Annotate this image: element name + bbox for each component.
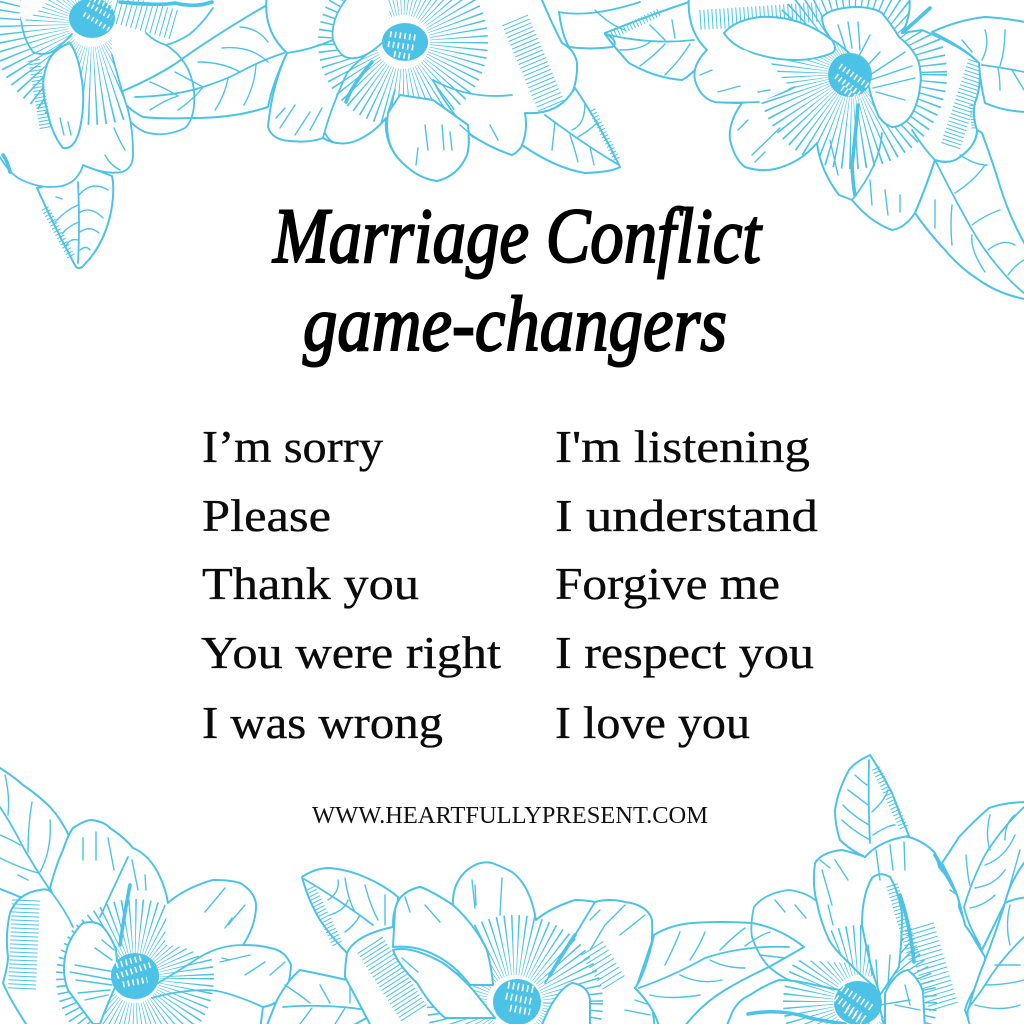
leaf: right of top middle flower (522, 88, 620, 173)
title line 1: Marriage Conflict (272, 192, 763, 279)
flower: bottom left (3, 820, 291, 1024)
leaf: long leaf between bottom middle and right flowers (635, 922, 804, 1024)
radial hatching (794, 16, 910, 132)
leaves: far right bottom (942, 802, 1024, 1024)
list: left column: Please (202, 490, 331, 541)
radial hatching (30, 0, 154, 86)
website footer: WWW.HEARTFULLYPRESENT.COM (312, 803, 708, 829)
list: right column: I'm listening (555, 421, 810, 472)
radial hatching (347, 0, 459, 98)
list: left column: I was wrong (202, 697, 443, 748)
list: right column: I respect you (555, 627, 814, 678)
leaf: long leaf between top left and top middle flowers (118, 5, 287, 118)
list: right column: Forgive me (555, 558, 780, 609)
flower: bottom right (725, 836, 985, 1024)
stamen (69, 0, 115, 38)
leaf: right side, descending (915, 130, 1024, 300)
leaf: above bottom middle flower (302, 868, 398, 953)
radial hatching (457, 945, 615, 1024)
flower: top middle (266, 0, 577, 181)
flower: top left (0, 0, 213, 187)
radial hatching (808, 950, 912, 1024)
floral border: bottom (0, 755, 1024, 1024)
flower: top right (689, 0, 980, 230)
list: left column: Thank you (202, 558, 419, 609)
list: right column (555, 421, 818, 748)
leaf: top left, pointing down (37, 165, 113, 268)
leaf: bottom, between left and middle flowers (265, 970, 380, 1024)
list: left column: You were right (201, 627, 501, 678)
petal: overlapping outline behind leaf (131, 45, 194, 134)
list: left column (201, 421, 501, 748)
leaf: top, between middle and right flowers (559, 2, 709, 80)
leaf: far top right (932, 17, 1024, 112)
floral border: top (0, 0, 1024, 300)
list: right column: I understand (555, 490, 818, 541)
title (272, 192, 763, 367)
leaf: far left bottom (0, 765, 70, 897)
title line 2: game-changers (303, 280, 727, 367)
leaf: pointed leaf above bottom right flower (835, 755, 909, 857)
radial hatching (83, 926, 187, 1024)
list: right column: I love you (555, 697, 750, 748)
list: left column: I’m sorry (202, 421, 383, 472)
flower: bottom middle (345, 862, 655, 1024)
